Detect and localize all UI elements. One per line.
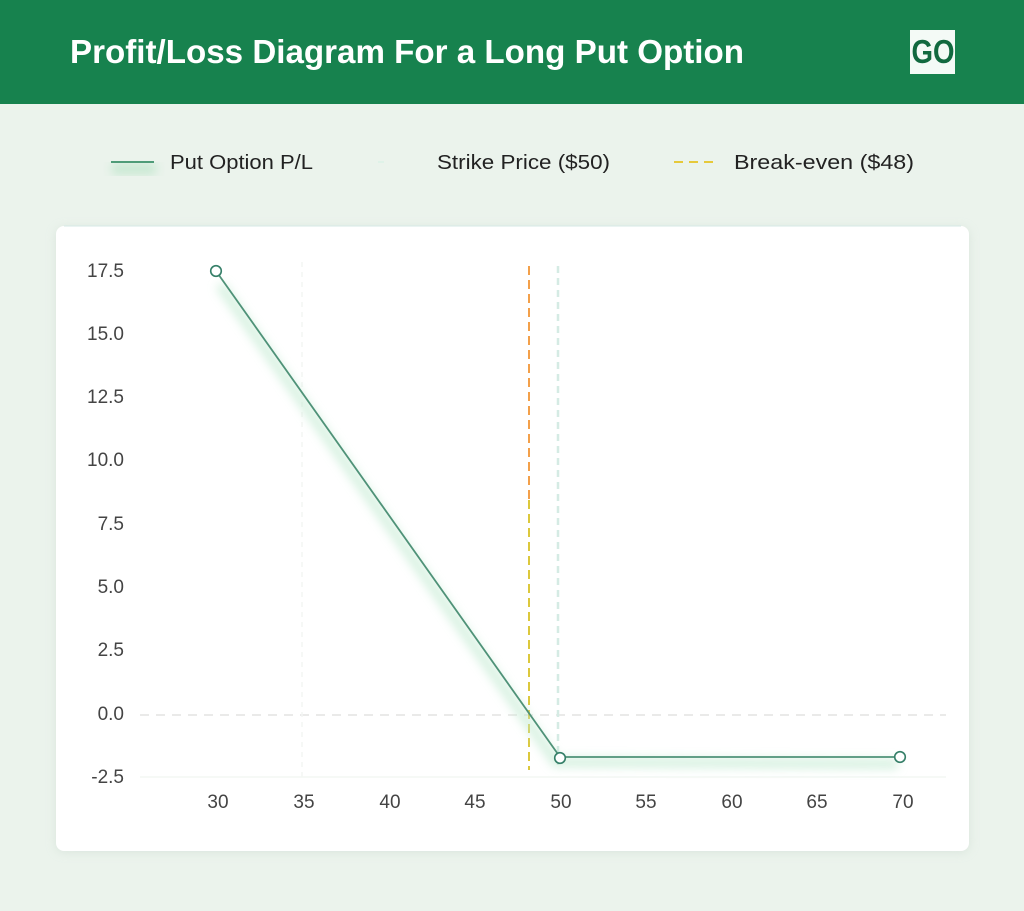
y axis labels: 7.5 — [98, 514, 124, 535]
x axis labels: 55 — [635, 792, 657, 813]
x axis labels: 50 — [550, 792, 572, 813]
x axis labels: 35 — [293, 792, 315, 813]
y axis labels: 2.5 — [98, 640, 124, 661]
x axis labels: 65 — [806, 792, 828, 813]
icon: GO logo: GO — [912, 33, 954, 70]
legend item: Put Option P/L: Put Option P/L — [170, 152, 313, 174]
line glow — [220, 285, 898, 764]
break-even line — [528, 266, 530, 770]
strike price line — [557, 266, 559, 770]
y axis labels: 15.0 — [87, 324, 124, 345]
y axis labels — [87, 261, 124, 788]
y axis labels: 5.0 — [98, 577, 124, 598]
header banner — [0, 0, 1024, 104]
x axis labels: 70 — [892, 792, 914, 813]
y axis labels: 17.5 — [87, 261, 124, 282]
y axis labels: 0.0 — [98, 704, 124, 725]
x axis labels — [207, 792, 914, 813]
x axis labels: 40 — [379, 792, 401, 813]
x axis labels: 45 — [464, 792, 486, 813]
y axis labels: -2.5 — [91, 767, 124, 788]
faint gridlines — [301, 262, 303, 780]
y axis labels: 10.0 — [87, 450, 124, 471]
y axis labels: 12.5 — [87, 387, 124, 408]
put option P/L line — [216, 271, 900, 757]
panel: chart card — [56, 226, 969, 852]
legend item: Put Option P/L — [111, 152, 313, 174]
zero line — [140, 714, 946, 716]
x axis labels: 60 — [721, 792, 743, 813]
x axis labels: 30 — [207, 792, 229, 813]
legend item: Break-even: Break-even ($48) — [734, 152, 914, 174]
legend — [111, 152, 914, 174]
line chart — [87, 261, 946, 813]
title: Profit/Loss Diagram For a Long Put Option — [70, 33, 744, 70]
legend item: Strike Price: Strike Price ($50) — [437, 152, 610, 174]
data points — [211, 266, 905, 763]
